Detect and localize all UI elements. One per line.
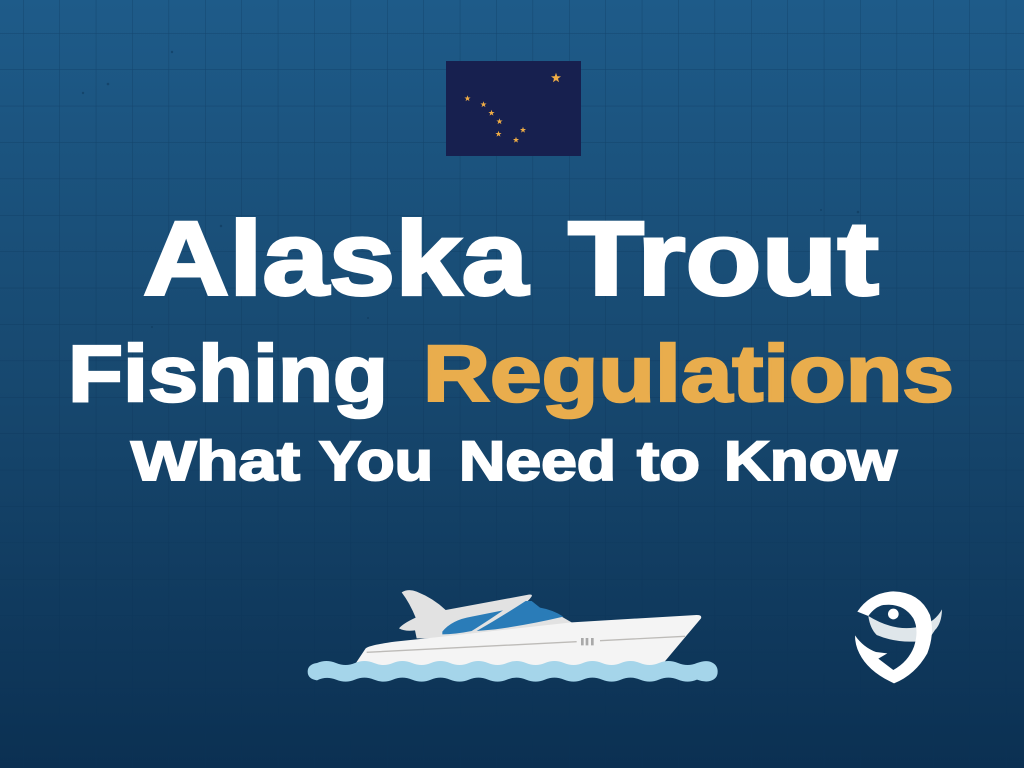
subtitle: What: [131, 429, 300, 492]
subtitle: You: [319, 429, 433, 492]
subtitle: [131, 429, 897, 492]
title: Alaska Trout: [143, 200, 879, 318]
icon: boat: [308, 590, 718, 682]
subtitle: Know: [724, 429, 897, 492]
title: Fishing Regulations: [68, 329, 954, 418]
title: Fishing Regulations: Fishing: [68, 329, 388, 418]
icon: Alaska flag: [446, 61, 581, 156]
subtitle: Need: [459, 429, 616, 492]
title: Alaska Trout: Alaska: [143, 200, 530, 318]
icon: fish logo: [855, 591, 942, 683]
subtitle: to: [637, 429, 700, 492]
title: Fishing Regulations: Regulations: [423, 329, 954, 418]
title: Alaska Trout: Trout: [568, 200, 879, 318]
